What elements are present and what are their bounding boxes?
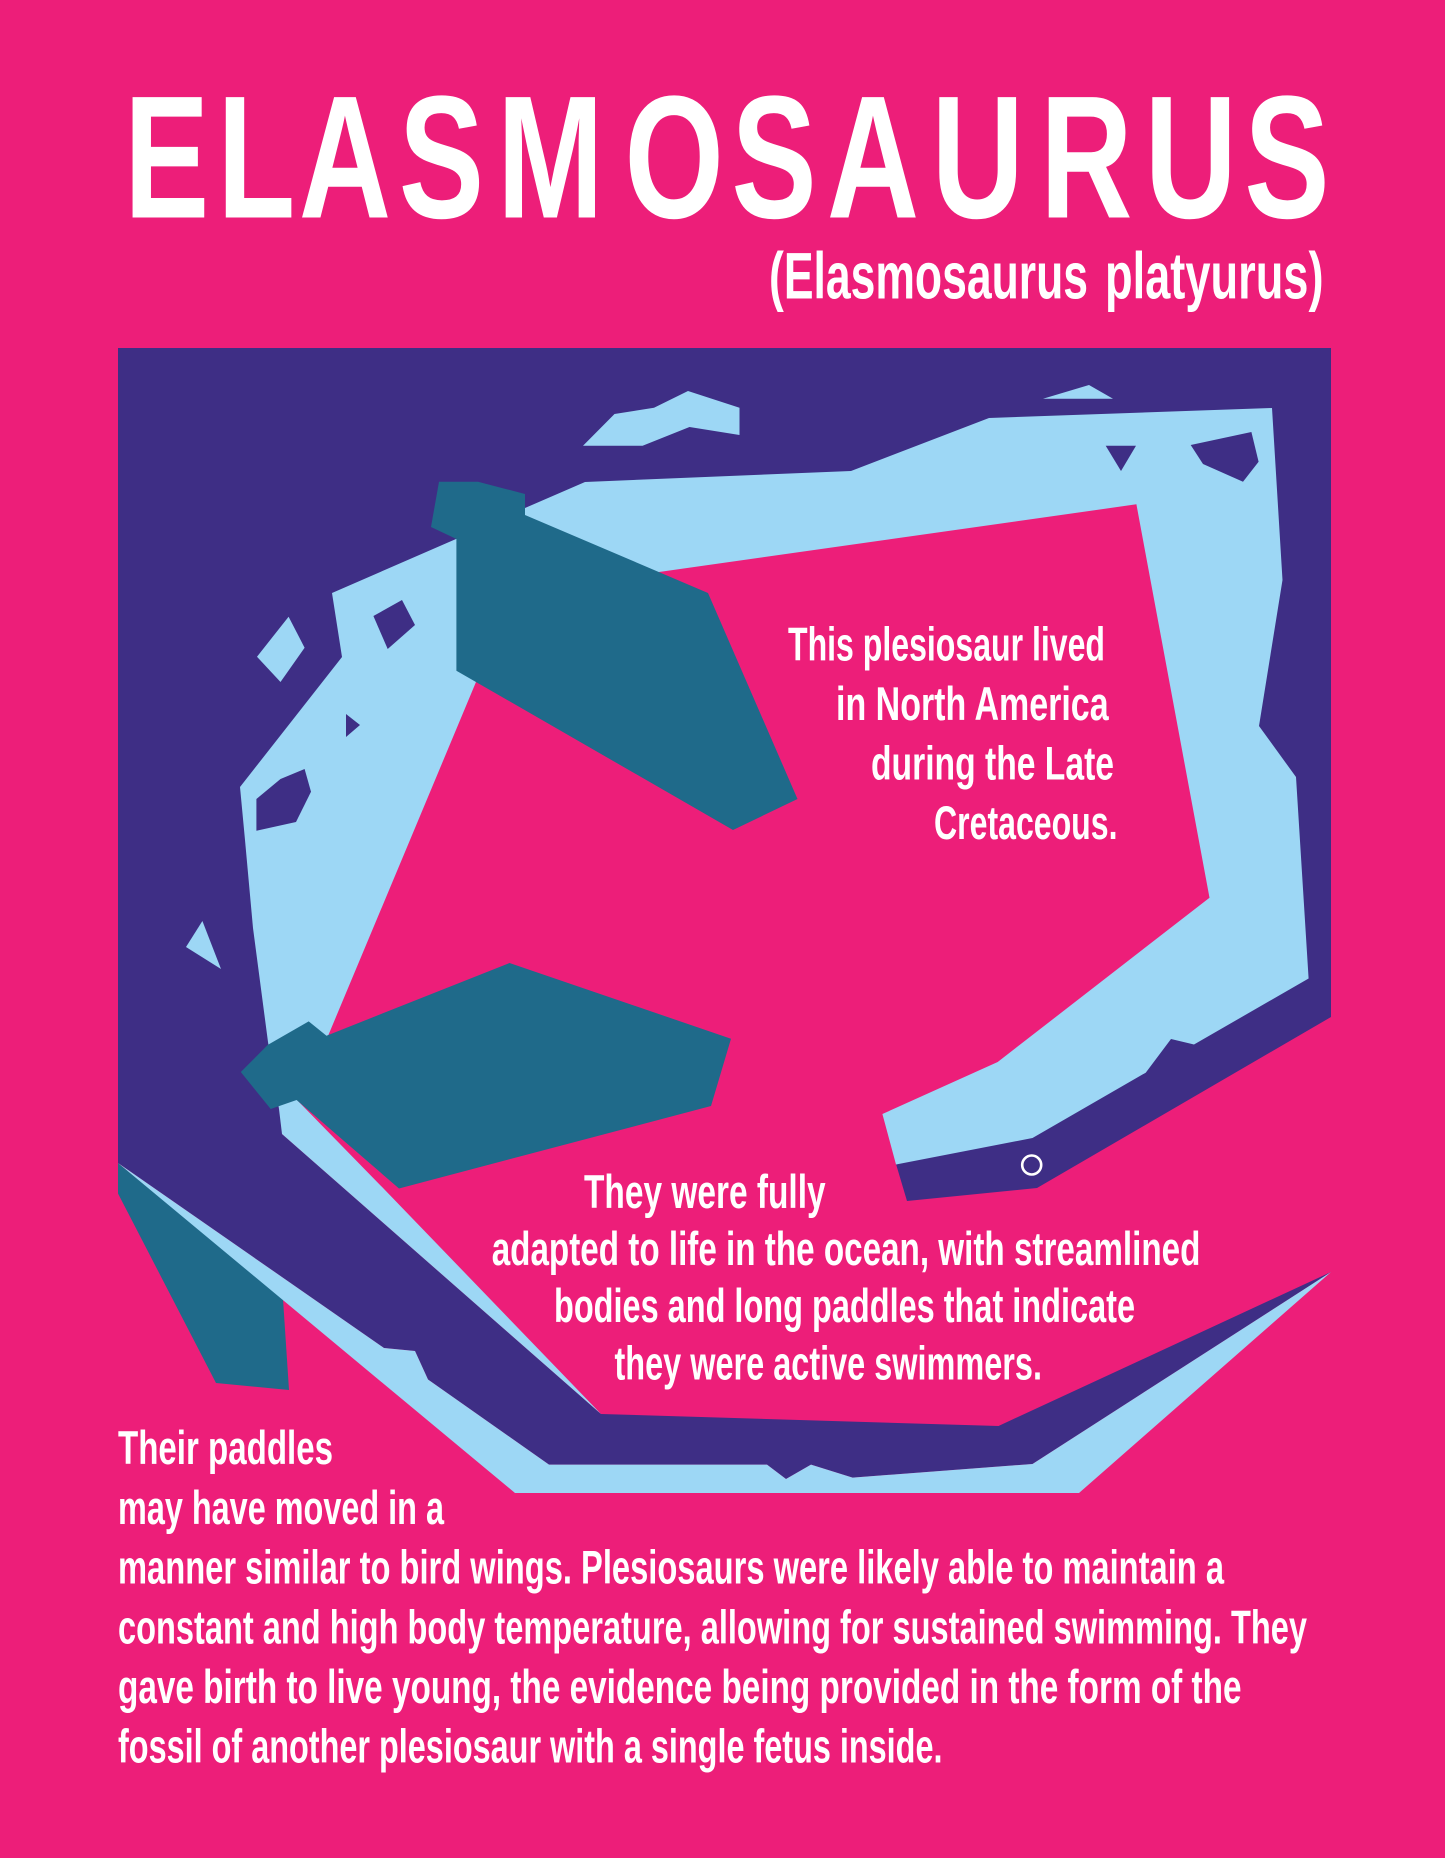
text block: habitat: This plesiosaur lived: [788, 618, 1105, 671]
body gap: [1191, 432, 1259, 482]
text block: habitat: during the Late: [871, 736, 1114, 789]
top ice sliver: [1043, 385, 1113, 399]
text block: biology: may have moved in a: [118, 1481, 445, 1534]
ice diamond: [257, 617, 305, 682]
tail fin: [118, 1163, 289, 1390]
small ice triangle: [186, 921, 221, 969]
body gap triangle: [1106, 446, 1136, 471]
text block: adaptation: [492, 1165, 1200, 1390]
upper paddle: [431, 482, 798, 830]
lower paddle: [241, 963, 731, 1188]
neck gap 2: [346, 714, 360, 737]
panel: elasmosaurus illustration: [118, 348, 1331, 1493]
text block: habitat: Cretaceous.: [934, 796, 1118, 849]
text block: adaptation: bodies and long paddles that indicate: [554, 1279, 1135, 1332]
lower tail body: [118, 1163, 1331, 1493]
neck gap 3: [256, 769, 311, 831]
title: ELASMOSAURUS: [124, 60, 1330, 255]
purple ocean backdrop: [118, 348, 1331, 1479]
text block: adaptation: they were active swimmers.: [614, 1336, 1042, 1390]
text block: biology: fossil of another plesiosaur with a single fetus inside.: [118, 1720, 942, 1772]
text block: biology: [118, 1421, 1307, 1772]
text block: habitat: [788, 618, 1118, 849]
neck gap 1: [373, 600, 415, 649]
main body and neck: [240, 408, 1309, 1414]
text block: habitat: in North America: [836, 677, 1109, 730]
text block: biology: Their paddles: [118, 1421, 333, 1474]
text block: adaptation: They were fully: [584, 1165, 826, 1218]
subtitle: (Elasmosaurus: [769, 238, 1088, 312]
ice cloud shape: [583, 391, 740, 446]
subtitle: platyurus): [1105, 238, 1324, 312]
eye: [1022, 1156, 1041, 1174]
